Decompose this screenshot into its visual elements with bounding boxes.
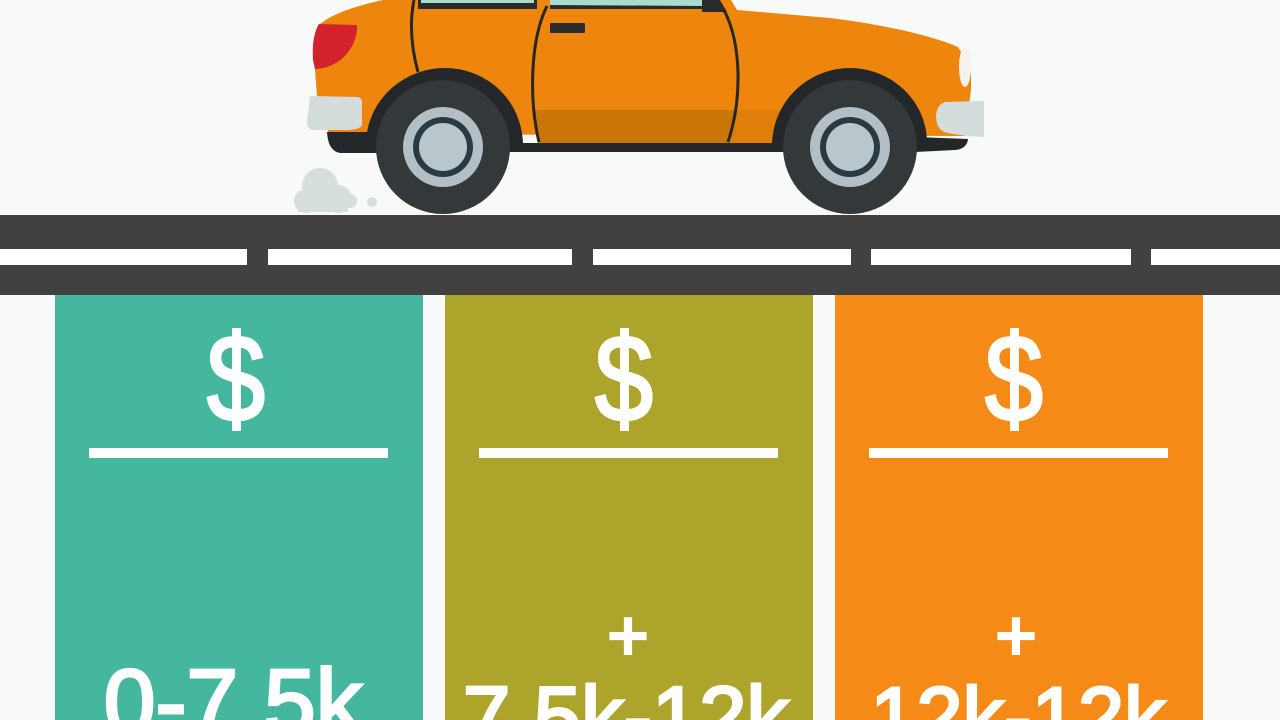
icon: car with exhaust (294, 0, 984, 214)
dollar sign: $ (595, 311, 653, 448)
plus sign: + (606, 594, 650, 677)
dollar sign: $ (207, 311, 265, 448)
bumpers (307, 96, 362, 130)
wheel left (376, 80, 510, 214)
underbody (327, 132, 968, 153)
divider (479, 448, 778, 458)
lower body mid shade (725, 110, 790, 143)
divider (869, 448, 1168, 458)
car body (314, 0, 971, 136)
wheel right (783, 80, 917, 214)
tail light (313, 24, 357, 69)
windows (418, 0, 537, 9)
road (0, 215, 1280, 295)
panel: 0-7.5k tier (55, 295, 423, 720)
exhaust smoke (294, 168, 377, 213)
wheel arches (366, 68, 523, 152)
dollar sign: $ (985, 311, 1043, 448)
panel: 12k-12k tier (835, 295, 1203, 720)
door lines (411, 0, 738, 142)
head light (959, 47, 971, 87)
plus sign: + (994, 594, 1038, 677)
panel: 7.5k-12k tier (445, 295, 813, 720)
divider (89, 448, 388, 458)
lower body shade (535, 110, 735, 143)
door handle (550, 23, 585, 33)
